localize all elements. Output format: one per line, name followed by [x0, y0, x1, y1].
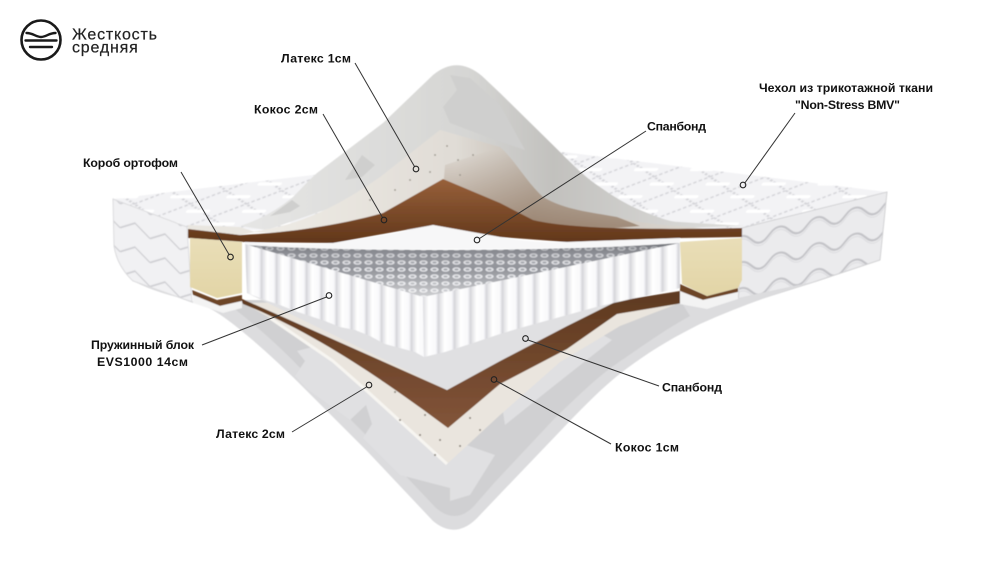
lower cover inner — [236, 300, 690, 516]
logo text: Жесткость — [72, 26, 158, 44]
upper spunbond — [245, 225, 680, 249]
icon: firmness circle — [22, 20, 60, 60]
quilted top surface — [113, 152, 887, 230]
callout: latex 1 cm — [281, 52, 419, 172]
logo: firmness medium — [22, 20, 158, 60]
left side panel — [113, 199, 192, 302]
lower latex — [243, 300, 677, 464]
foam top strip — [188, 225, 255, 235]
callout: knitted cover: "Non-Stress BMV" — [795, 98, 900, 112]
mattress illustration — [113, 65, 887, 530]
callout: latex 2 cm — [216, 382, 372, 441]
left foam base — [192, 290, 242, 306]
lower spunbond — [247, 288, 680, 390]
callout: coconut 1 cm: Кокос 1см — [615, 440, 679, 454]
callout: knitted cover — [740, 81, 933, 188]
latex shadow — [443, 147, 640, 232]
cover pockets — [295, 306, 660, 501]
callout: knitted cover: Чехол из трикотажной ткани — [759, 81, 933, 95]
callout: spunbond lower — [523, 336, 722, 394]
lower coconut — [240, 291, 703, 428]
callout: spunbond upper: Спанбонд — [647, 120, 706, 134]
upper cover — [240, 65, 745, 230]
callout: coconut 2 cm — [254, 102, 387, 223]
latex edge strip — [270, 318, 447, 464]
callout: orthofoam box — [83, 156, 233, 260]
callout: spring block: Пружинный блок — [91, 338, 195, 352]
callout: spunbond lower: Спанбонд — [662, 380, 722, 394]
spring right side — [423, 243, 680, 357]
spring block — [245, 243, 680, 357]
callout: coconut 1 cm — [491, 377, 679, 454]
cover pockets — [270, 75, 525, 216]
callout: latex 2 cm: Латекс 2см — [216, 427, 285, 441]
upper latex — [250, 130, 707, 234]
right foam base — [680, 284, 738, 300]
latex holes — [395, 392, 480, 455]
callout: orthofoam box: Короб ортофом — [83, 156, 178, 170]
right orthofoam box — [680, 238, 742, 296]
callout: coconut 2 cm: Кокос 2см — [254, 102, 318, 116]
latex holes — [370, 146, 473, 200]
right side panel — [738, 192, 887, 306]
callout: spring block — [91, 293, 332, 369]
callout: latex 1 cm: Латекс 1см — [281, 52, 351, 66]
upper coconut — [188, 179, 742, 243]
lower cover — [133, 281, 817, 530]
callout: spring block: EVS1000 14см — [97, 355, 188, 369]
left orthofoam box — [190, 238, 242, 298]
callout: spunbond upper — [474, 120, 706, 243]
spring left side — [245, 244, 424, 357]
logo text: средняя — [72, 40, 139, 56]
spring top face — [245, 243, 680, 297]
